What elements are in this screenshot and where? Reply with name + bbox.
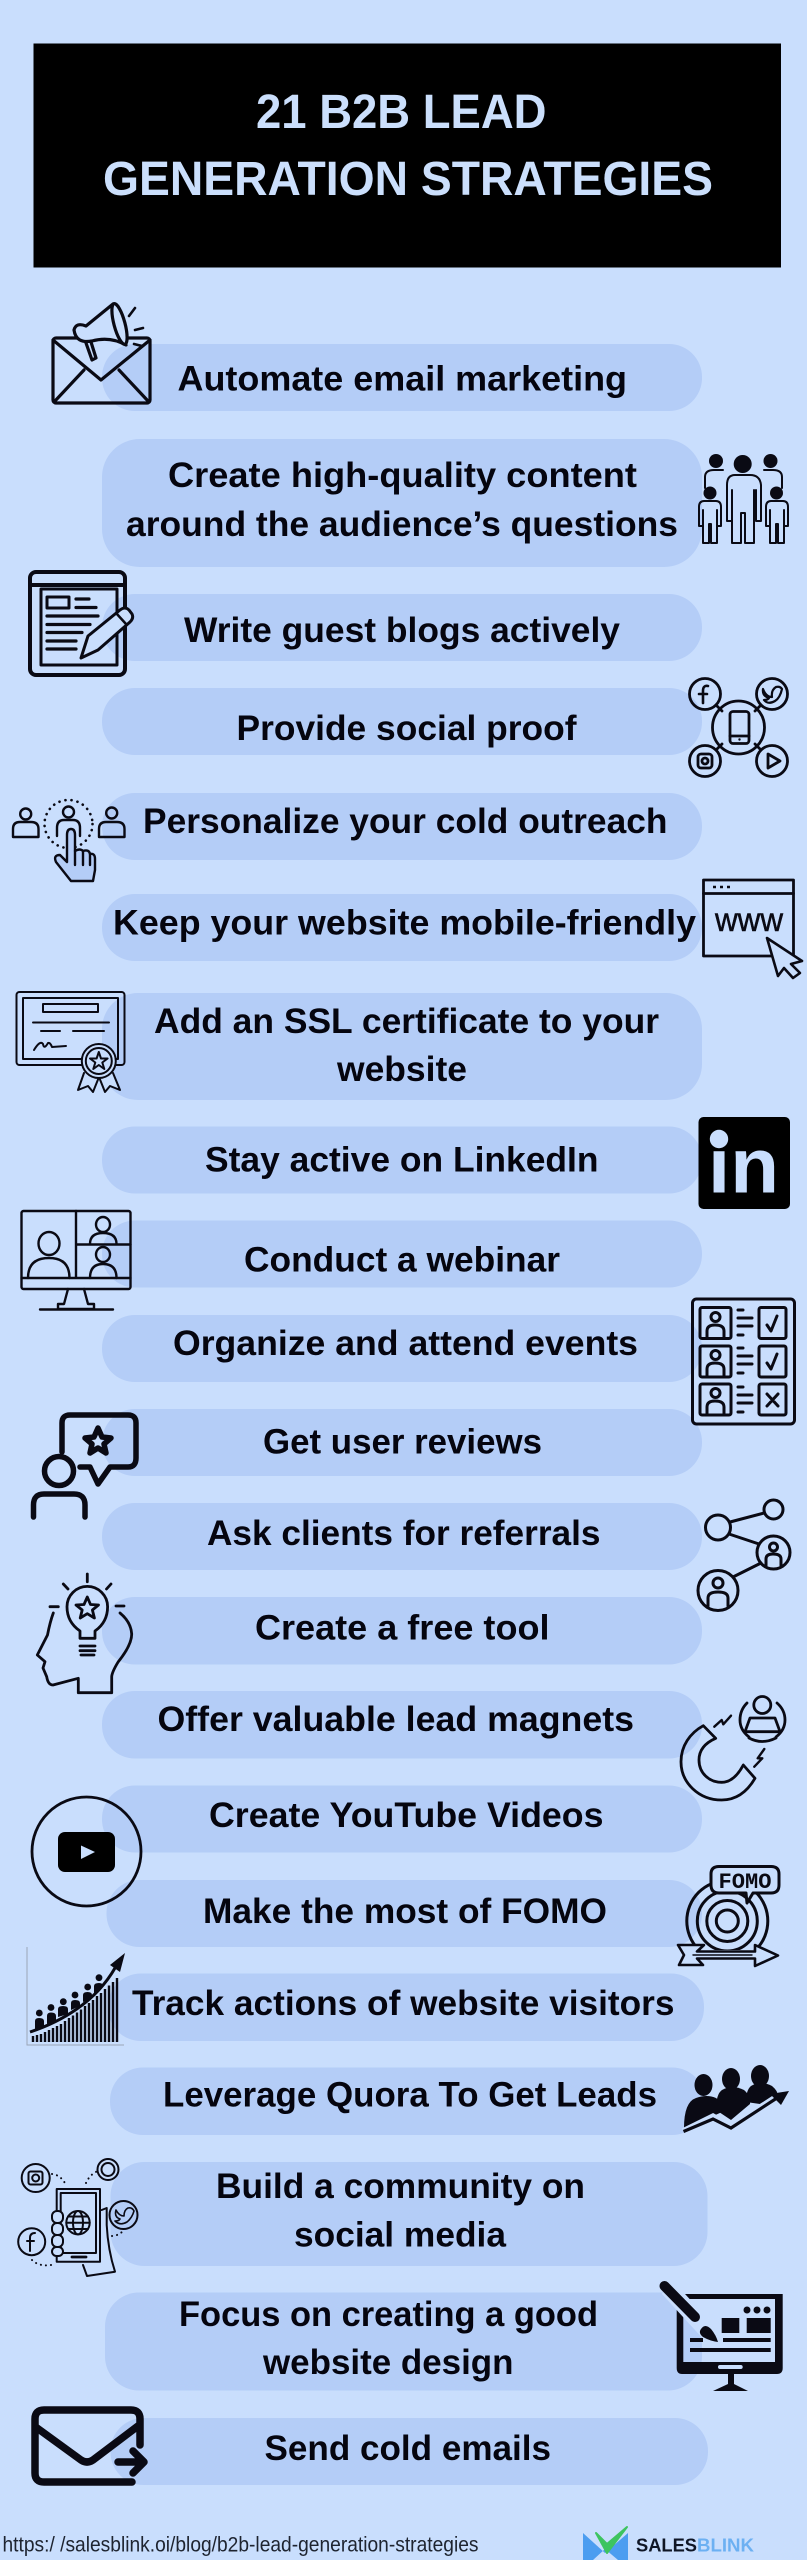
icon: social media hub [690,678,788,776]
icon: growth chart with people [27,1947,125,2045]
strategy 13 pill [102,1597,702,1664]
strategy 19 pill: Build a community on [216,2167,585,2206]
strategy 15 pill [102,1786,702,1852]
icon: audience people [699,454,788,543]
strategy 19 pill: social media [294,2216,507,2254]
strategy 17 pill: Track actions of website visitors [132,1984,674,2023]
strategy 5 pill: Personalize your cold outreach [143,802,668,841]
strategy 7 pill: Add an SSL certificate to your [154,1002,659,1041]
icon: webinar monitor [22,1211,130,1310]
icon: FOMO target [678,1866,779,1966]
title banner [34,44,781,268]
icon: SSL certificate with badge [16,992,124,1092]
icon: rising team silhouettes [684,2065,789,2132]
icon: phone with social media circles [18,2159,138,2276]
icon: user review speech bubble [34,1415,136,1517]
SalesBlink logo: SALES [636,2536,697,2556]
icon: LinkedIn logo: in [708,1122,779,1210]
strategy 16 pill [106,1880,702,1947]
strategy 4 pill: Provide social proof [236,709,577,748]
strategy 19 pill [110,2162,708,2266]
strategy 7 pill [102,993,702,1100]
strategy 2 pill [102,439,702,567]
strategy 3 pill: Write guest blogs actively [184,611,621,650]
source URL footer: https:/ /salesblink.oi/blog/b2b-lead-generation-strategies [2,2534,478,2556]
strategy 21 pill [110,2418,708,2485]
strategy 17 pill [108,1974,704,2041]
title banner: GENERATION STRATEGIES [103,153,713,206]
icon: personalized outreach people and hand [13,800,124,881]
strategy 18 pill [110,2068,705,2135]
icon: YouTube circle [32,1797,141,1906]
strategy 10 pill [102,1315,702,1382]
icon: send email with arrow [35,2410,144,2482]
strategy 1 pill: Automate email marketing [178,360,627,398]
icon: events checklist [692,1299,794,1424]
strategy 20 pill: website design [262,2343,514,2382]
strategy 7 pill: website [336,1050,467,1089]
icon: website window with cursor: www [714,901,783,938]
strategy 8 pill: Stay active on LinkedIn [205,1140,598,1180]
strategy 20 pill: Focus on creating a good [179,2295,598,2334]
strategy 9 pill: Conduct a webinar [244,1240,560,1280]
strategy 12 pill: Ask clients for referrals [207,1514,600,1553]
strategy 11 pill: Get user reviews [263,1422,542,1462]
strategy 5 pill [102,793,702,860]
strategy 8 pill [102,1126,702,1194]
strategy 16 pill: Make the most of FOMO [203,1892,607,1931]
strategy 13 pill: Create a free tool [255,1608,550,1648]
strategy 15 pill: Create YouTube Videos [209,1796,604,1835]
strategy 3 pill [102,594,702,661]
strategy 11 pill [102,1409,702,1476]
strategy 10 pill: Organize and attend events [173,1324,638,1363]
strategy 18 pill: Leverage Quora To Get Leads [163,2076,657,2114]
icon: envelope with megaphone [53,302,150,403]
SalesBlink logo: BLINK [697,2536,754,2556]
strategy 2 pill: around the audience’s questions [126,505,678,544]
icon: referral network [698,1500,790,1610]
strategy 20 pill [105,2292,702,2390]
icon: design monitor with pen [663,2285,783,2391]
strategy 9 pill [102,1220,702,1288]
SalesBlink logo [583,2527,754,2560]
strategy 6 pill: Keep your website mobile-friendly [113,904,697,942]
strategy 6 pill [102,894,702,961]
icon: lead magnet [681,1696,785,1800]
icon: article with pencil [30,572,133,675]
icon: head with idea bulb [37,1574,132,1693]
title banner: 21 B2B LEAD [256,86,546,139]
strategy 12 pill [102,1503,702,1570]
strategy 14 pill [102,1691,702,1758]
strategy 1 pill [102,344,702,411]
icon: website window with cursor [704,880,802,978]
icon: FOMO target: FOMO [718,1870,772,1895]
strategy 21 pill: Send cold emails [264,2429,551,2468]
strategy 4 pill [102,688,702,755]
strategy 2 pill: Create high-quality content [168,456,637,495]
strategy 14 pill: Offer valuable lead magnets [158,1700,634,1739]
